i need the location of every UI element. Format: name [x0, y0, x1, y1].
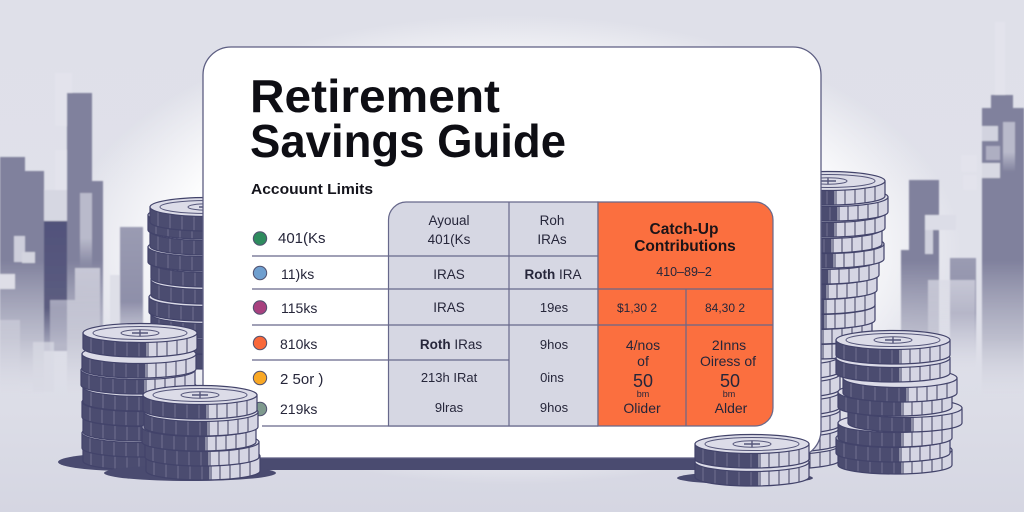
column: annual 401(k)s: 213h IRat: [421, 370, 478, 385]
catch-up right cell: [700, 337, 756, 416]
column: Roth IRAs: Roh: [540, 213, 564, 228]
column: annual 401(k)s: [420, 213, 482, 415]
legend item: 401(Ks: 401(Ks: [278, 230, 326, 247]
catch-up heading: Catch-Up: [650, 221, 718, 238]
title: Savings Guide: [250, 115, 566, 167]
legend item: 2 5or ): [253, 371, 323, 388]
column: Roth IRAs: 9hos: [540, 400, 569, 415]
catch-up left cell: 4/nos: [626, 337, 660, 353]
coin stack: right front: [836, 330, 962, 474]
legend item: 219ks: 219ks: [280, 401, 317, 417]
legend list: [253, 230, 326, 417]
legend item: 2 5or ): 2 5or ): [280, 371, 323, 388]
catch-up right cell: 2Inns: [712, 337, 746, 353]
column: Roth IRAs: 0ins: [540, 370, 564, 385]
catch-up right cell: bm: [723, 389, 735, 399]
coin stack: bottom centre: [677, 434, 813, 486]
catch-up right cell: Oiress of: [700, 353, 756, 369]
coin stack: behind card left: [148, 198, 265, 369]
coin stack: left middle: [58, 324, 202, 471]
catch-up right cell: Alder: [715, 400, 748, 416]
skyline: left: [0, 73, 143, 400]
catch-up values: 410–89–2: [656, 265, 712, 279]
catch-up left cell: [623, 337, 661, 416]
legend item: 810ks: [253, 336, 317, 352]
legend item: 810ks: 810ks: [280, 336, 317, 352]
catch-up values: [617, 265, 745, 315]
legend item: 115ks: 115ks: [281, 300, 317, 316]
catch-up values: $1,30 2: [617, 301, 657, 315]
subheading: Accouunt Limits: [251, 182, 373, 198]
table: catch-up column: [598, 202, 773, 426]
column: Roth IRAs: [524, 213, 582, 415]
card shadow: [258, 446, 703, 470]
column: annual 401(k)s: 9lras: [435, 400, 464, 415]
column: Roth IRAs: IRAs: [537, 232, 567, 247]
column: annual 401(k)s: IRAS: [433, 300, 465, 315]
catch-up values: 84,30 2: [705, 301, 745, 315]
catch-up heading: [634, 221, 736, 255]
catch-up left cell: bm: [637, 389, 649, 399]
card: [203, 47, 821, 458]
column: Roth IRAs: 19es: [540, 300, 569, 315]
column: Roth IRAs: Roth IRA: [524, 267, 582, 282]
catch-up left cell: of: [637, 353, 649, 369]
column: annual 401(k)s: Roth IRas: [420, 337, 482, 352]
skyline: right: [901, 22, 1024, 400]
legend item: 401(Ks: [253, 230, 326, 247]
row dividers: [252, 256, 598, 426]
coin stack: behind card right: [726, 172, 888, 469]
catch-up right cell: 50: [720, 371, 740, 391]
column: annual 401(k)s: Ayoual: [428, 213, 470, 228]
title: [250, 70, 566, 167]
catch-up left cell: 50: [633, 371, 653, 391]
catch-up heading: Contributions: [634, 238, 736, 255]
table: grey columns: [388, 202, 598, 426]
title: Retirement: [250, 70, 500, 122]
column: annual 401(k)s: 401(Ks: [428, 232, 471, 247]
catch-up left cell: Olider: [623, 400, 661, 416]
legend item: 219ks: [253, 401, 317, 417]
column: Roth IRAs: 9hos: [540, 337, 569, 352]
legend item: 11)ks: 11)ks: [281, 266, 314, 282]
coin stack: left front: [104, 386, 276, 481]
column: annual 401(k)s: IRAS: [433, 267, 465, 282]
legend item: 11)ks: [253, 266, 314, 282]
legend item: 115ks: [253, 300, 317, 316]
